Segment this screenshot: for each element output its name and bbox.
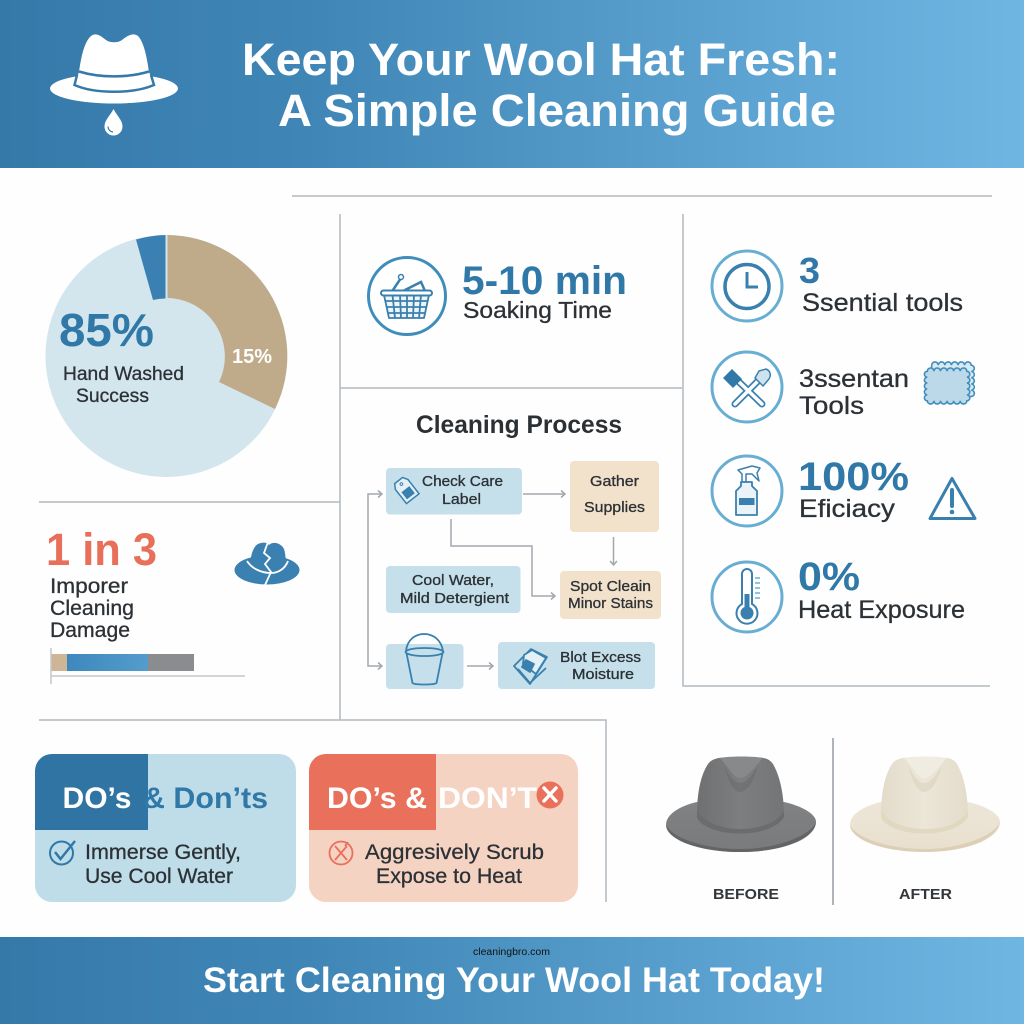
- text: do instructions: [85, 840, 241, 888]
- step: gather supplies: Supplies: [584, 500, 645, 516]
- source url: cleaningbro.com: [473, 947, 550, 958]
- stat row: 100% efficiency: Eficiacy: [799, 495, 896, 523]
- label: improper cleaning damage: Imporer: [50, 575, 128, 598]
- step: blot excess moisture: [498, 642, 655, 689]
- text: don't instructions: Aggresively Scrub: [365, 840, 544, 864]
- heading: do's and don'ts: & Don’ts: [143, 782, 268, 815]
- heading: do's and don't: [327, 782, 537, 815]
- call to action: Start Cleaning Your Wool Hat Today!: [203, 961, 825, 1000]
- icon: cleaning cloth: [924, 362, 974, 404]
- panel: improper cleaning damage: [46, 524, 300, 684]
- icon: warning triangle: [930, 478, 975, 518]
- step: cool water mild detergent: Mild Detergient: [400, 591, 509, 607]
- stat: 15%: 15%: [232, 346, 272, 368]
- label: improper cleaning damage: Cleaning: [50, 597, 134, 620]
- heading: do's and don'ts: DO’s: [62, 782, 132, 815]
- hat: after (cream): [850, 756, 1000, 852]
- label: hand washed success: Success: [76, 386, 149, 407]
- text: don't instructions: [365, 840, 544, 888]
- icon: thermometer: [712, 562, 782, 632]
- text: don't instructions: Expose to Heat: [376, 864, 522, 888]
- title: A Simple Cleaning Guide: [278, 85, 836, 136]
- title: [242, 34, 840, 136]
- stat row: essential tools: Tools: [799, 392, 864, 420]
- step: bucket: [386, 634, 464, 689]
- text: do instructions: Use Cool Water: [85, 864, 233, 888]
- pie slice: blue: [136, 235, 166, 300]
- step: spot clean minor stains: Minor Stains: [568, 596, 653, 612]
- panel: cleaning process flow: [368, 411, 661, 689]
- step: check care label: Check Care: [422, 474, 503, 490]
- label: after: AFTER: [899, 886, 952, 903]
- icon: folded towels: [514, 649, 547, 684]
- label: improper cleaning damage: [50, 575, 134, 642]
- step: cool water mild detergent: Cool Water,: [412, 573, 494, 589]
- card: do's: [35, 754, 296, 902]
- icon: white hat with water drop: [50, 34, 178, 136]
- step: check care label: Label: [442, 492, 481, 508]
- stat row: 0% heat exposure: [712, 555, 965, 632]
- card header block: blue: [35, 754, 148, 830]
- icon: check mark: [50, 841, 75, 864]
- card header block: red: [309, 754, 436, 830]
- icon: cracked hat: [234, 542, 300, 585]
- label: improper cleaning damage: Damage: [50, 619, 130, 642]
- pie slice: tan 15%: [168, 235, 287, 409]
- step: blot excess moisture: Moisture: [572, 667, 634, 683]
- icon: crossed brush and spatula: [712, 352, 782, 422]
- heading: do's and don'ts: [62, 782, 268, 815]
- flow arrows: [368, 490, 617, 670]
- hat: before (grey): [666, 756, 816, 852]
- icon: care tag: [392, 476, 419, 504]
- heading: cleaning process: Cleaning Process: [416, 411, 622, 439]
- step: check care label: [386, 468, 522, 514]
- icon: cross badge: [536, 782, 564, 808]
- stat row: essential tools: 3ssentan: [799, 365, 909, 393]
- stat: 85%: 85%: [59, 304, 154, 356]
- footer banner: [0, 937, 1024, 1024]
- step: blot excess moisture: Blot Excess: [560, 650, 641, 666]
- stat row: 3 essential tools: Ssential tools: [802, 289, 963, 317]
- icon: spray bottle: [712, 456, 782, 526]
- card: don'ts: [309, 754, 578, 902]
- label: before: BEFORE: [713, 886, 779, 903]
- heading: do's and don't: DON’T: [438, 782, 537, 815]
- icon: cross circle: [330, 842, 352, 864]
- step: gather supplies: [570, 461, 659, 532]
- label: hand washed success: [63, 364, 184, 407]
- text: do instructions: Immerse Gently,: [85, 840, 241, 864]
- step: spot clean minor stains: Spot Cleain: [570, 579, 651, 595]
- label: soaking time: Soaking Time: [463, 297, 612, 323]
- step: gather supplies: Gather: [590, 474, 639, 490]
- icon: bucket: [406, 634, 444, 684]
- stat row: 3 essential tools: 3: [799, 250, 820, 291]
- title: Keep Your Wool Hat Fresh:: [242, 34, 840, 85]
- stat row: 100% efficiency: 100%: [798, 455, 909, 499]
- icon: basket: [368, 258, 446, 334]
- stat row: 0% heat exposure: 0%: [798, 555, 860, 599]
- step: spot clean minor stains: [560, 571, 661, 619]
- stat row: 3 essential tools: [712, 250, 963, 321]
- stacked bar chart: [51, 648, 245, 684]
- stat: 5-10 min: 5-10 min: [462, 259, 627, 303]
- heading: do's and don't: DO’s &: [327, 782, 427, 815]
- stat row: essential tools: [712, 352, 974, 422]
- icon: clock: [712, 251, 782, 321]
- stat row: 0% heat exposure: Heat Exposure: [798, 596, 965, 624]
- panel: hand washed pie chart: [46, 235, 288, 477]
- label: hand washed success: Hand Washed: [63, 364, 184, 385]
- layout divider lines: [39, 196, 992, 902]
- stat: 1 in 3: 1 in 3: [46, 524, 157, 575]
- stat row: 100% efficiency: [712, 455, 975, 526]
- panel: soaking time: [368, 258, 627, 334]
- divider between before and after: [832, 738, 834, 905]
- panel: before and after: [666, 738, 1000, 905]
- panel: key stats column: [712, 250, 975, 632]
- step: cool water mild detergent: [386, 566, 520, 613]
- header banner: [0, 0, 1024, 168]
